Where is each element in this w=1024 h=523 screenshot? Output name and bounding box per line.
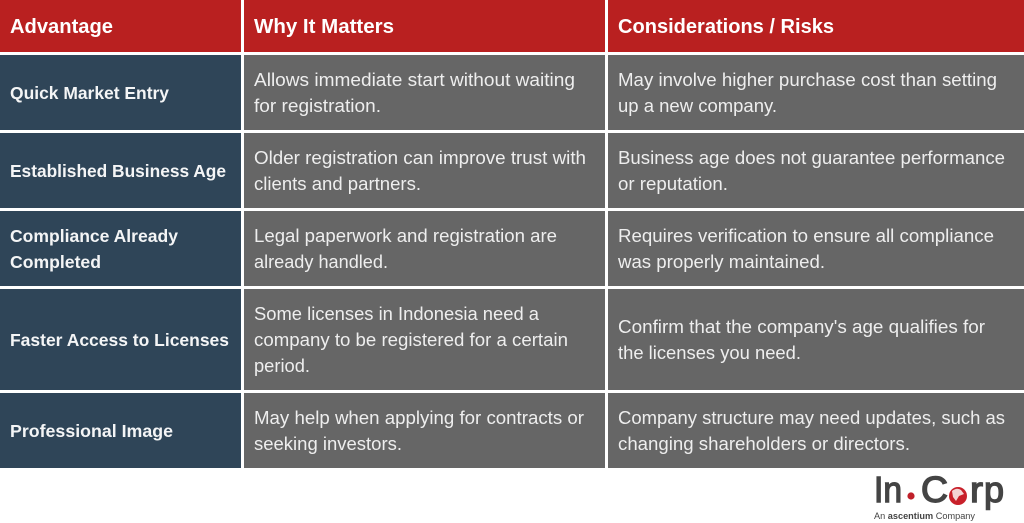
considerations cell: up a new company. bbox=[618, 96, 777, 116]
logo wordmark: p bbox=[984, 469, 1004, 510]
considerations cell: the licenses you need. bbox=[618, 343, 801, 363]
considerations cell bbox=[608, 55, 1024, 130]
header: Why It Matters: Why It Matters bbox=[254, 16, 394, 38]
why it matters cell: Older registration can improve trust with bbox=[254, 148, 586, 168]
considerations cell bbox=[608, 211, 1024, 286]
considerations cell: Business age does not guarantee performance bbox=[618, 148, 1005, 168]
logo wordmark: In bbox=[874, 469, 902, 510]
advantage cell bbox=[0, 393, 241, 468]
considerations cell: was properly maintained. bbox=[617, 252, 825, 272]
considerations cell bbox=[608, 289, 1024, 390]
logo red dot bbox=[907, 492, 915, 500]
considerations cell bbox=[608, 393, 1024, 468]
why it matters cell: for registration. bbox=[254, 96, 381, 116]
logo wordmark: C bbox=[921, 469, 948, 510]
considerations cell: Company structure may need updates, such as bbox=[618, 408, 1005, 428]
advantage cell bbox=[0, 133, 241, 208]
logo tagline: An ascentium Company bbox=[874, 511, 975, 521]
why it matters cell: already handled. bbox=[254, 252, 388, 272]
considerations cell: Confirm that the company's age qualifies for bbox=[618, 317, 985, 337]
advantage cell: Quick Market Entry bbox=[10, 83, 169, 103]
why it matters cell bbox=[244, 55, 605, 130]
why it matters cell: clients and partners. bbox=[254, 174, 421, 194]
row: Established Business Age bbox=[0, 133, 1024, 208]
why it matters cell: company to be registered for a certain bbox=[254, 330, 568, 350]
considerations cell bbox=[608, 133, 1024, 208]
why it matters cell bbox=[244, 133, 605, 208]
header: Considerations / Risks: Considerations / Risks bbox=[618, 16, 834, 38]
considerations cell: or reputation. bbox=[618, 174, 728, 194]
icon: globe bbox=[949, 487, 967, 505]
logo wordmark bbox=[874, 469, 1004, 510]
why it matters cell: Legal paperwork and registration are bbox=[254, 226, 557, 246]
considerations cell: Requires verification to ensure all compliance bbox=[618, 226, 994, 246]
why it matters cell bbox=[244, 289, 605, 390]
considerations cell: changing shareholders or directors. bbox=[618, 434, 910, 454]
why it matters cell: period. bbox=[254, 356, 310, 376]
header row bbox=[0, 0, 1024, 52]
row: Professional Image bbox=[0, 393, 1024, 468]
why it matters cell: seeking investors. bbox=[254, 434, 402, 454]
row: Quick Market Entry bbox=[0, 55, 1024, 130]
header: Considerations / Risks bbox=[608, 0, 1024, 52]
advantage cell bbox=[0, 211, 241, 286]
logo wordmark: r bbox=[970, 469, 983, 510]
row: Faster Access to Licenses bbox=[0, 289, 1024, 390]
logo: InCorp bbox=[874, 469, 1004, 521]
advantage cell bbox=[0, 289, 241, 390]
why it matters cell: May help when applying for contracts or bbox=[254, 408, 584, 428]
header: Why It Matters bbox=[244, 0, 605, 52]
row: Compliance Already Completed bbox=[0, 211, 1024, 286]
advantage cell: Professional Image bbox=[10, 421, 173, 441]
advantage cell: Completed bbox=[10, 252, 101, 272]
why it matters cell bbox=[244, 211, 605, 286]
advantage cell: Compliance Already bbox=[10, 226, 178, 246]
advantage cell: Established Business Age bbox=[10, 161, 226, 181]
header: Advantage: Advantage bbox=[10, 16, 113, 38]
why it matters cell: Allows immediate start without waiting bbox=[254, 70, 575, 90]
advantage cell: Faster Access to Licenses bbox=[10, 330, 229, 350]
why it matters cell: Some licenses in Indonesia need a bbox=[254, 304, 540, 324]
advantage cell bbox=[0, 55, 241, 130]
header: Advantage bbox=[0, 0, 241, 52]
why it matters cell bbox=[244, 393, 605, 468]
considerations cell: May involve higher purchase cost than setting bbox=[618, 70, 997, 90]
